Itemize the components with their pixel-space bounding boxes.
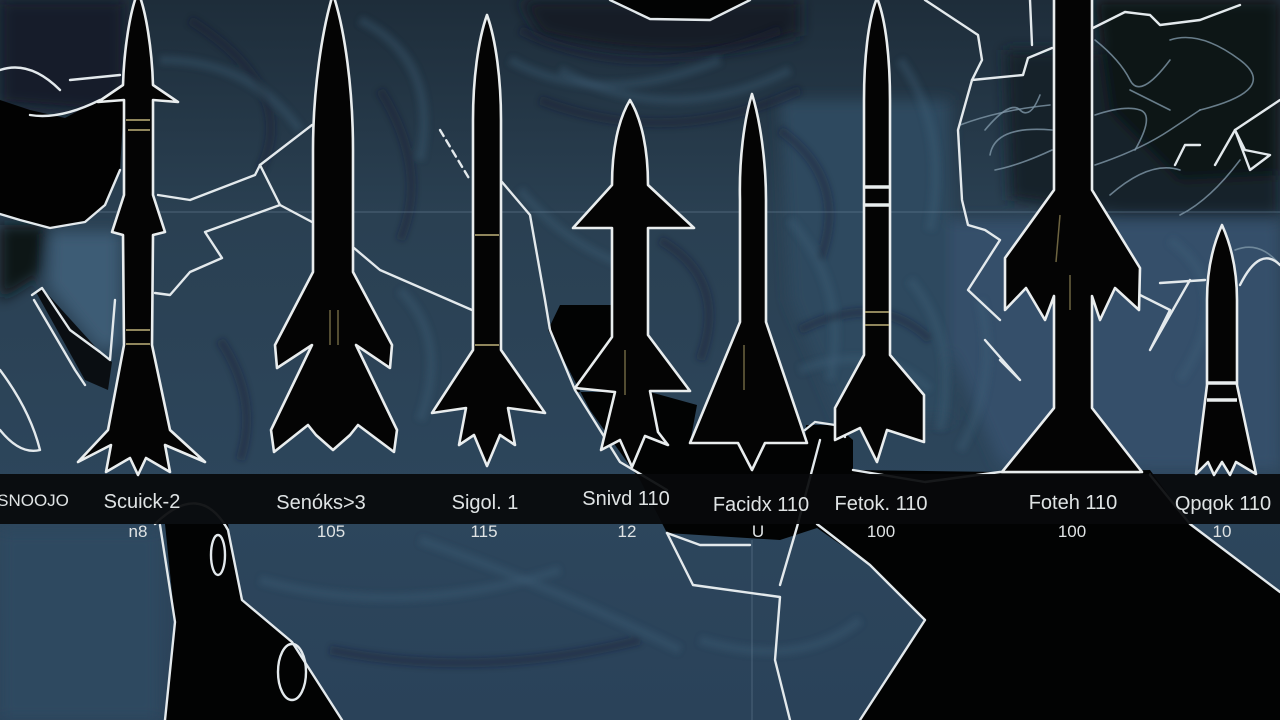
- missile 3: [432, 15, 545, 466]
- land: central gulf: [548, 305, 1280, 720]
- value: column 1: n8: [129, 522, 147, 541]
- value: column 5: U: [752, 522, 764, 541]
- missile 1: [78, 0, 205, 475]
- value: column 3: 115: [470, 522, 498, 541]
- band values: [129, 522, 1231, 541]
- value: column 8: 10: [1213, 522, 1231, 541]
- thin river texture top right: [960, 38, 1280, 265]
- missile 5: [690, 94, 807, 470]
- label band: [0, 474, 1280, 524]
- river: left inlet: [36, 288, 112, 390]
- label: column 8: Qpqok 110: [1175, 493, 1271, 515]
- missile 8: [1196, 225, 1256, 475]
- label: column 6: Fetok. 110: [834, 493, 928, 515]
- missile 6: [835, 0, 924, 462]
- band labels: [0, 488, 1271, 516]
- value: column 2: 105: [317, 522, 345, 541]
- label: column 1: Scuick-2: [104, 491, 180, 513]
- value: column 6: 100: [867, 522, 895, 541]
- land: upper left: [0, 100, 124, 228]
- missile 4: [573, 100, 694, 467]
- value: column 4: 12: [618, 522, 636, 541]
- faint grid lines: [0, 211, 1280, 213]
- value: column 7: 100: [1058, 522, 1086, 541]
- label: column 4: Snivd 110: [582, 488, 670, 510]
- land: south-central peninsula: [165, 524, 342, 720]
- label: column 7: Foteh 110: [1029, 492, 1117, 514]
- label: column 3: Sigol. 1: [452, 492, 518, 514]
- missile 7: [1002, 0, 1142, 472]
- label: column 2: Senóks>3: [276, 492, 366, 514]
- map contour texture: [160, 20, 1208, 663]
- label: column 5: Facidx 110: [713, 494, 809, 516]
- missile 2: [271, 0, 397, 452]
